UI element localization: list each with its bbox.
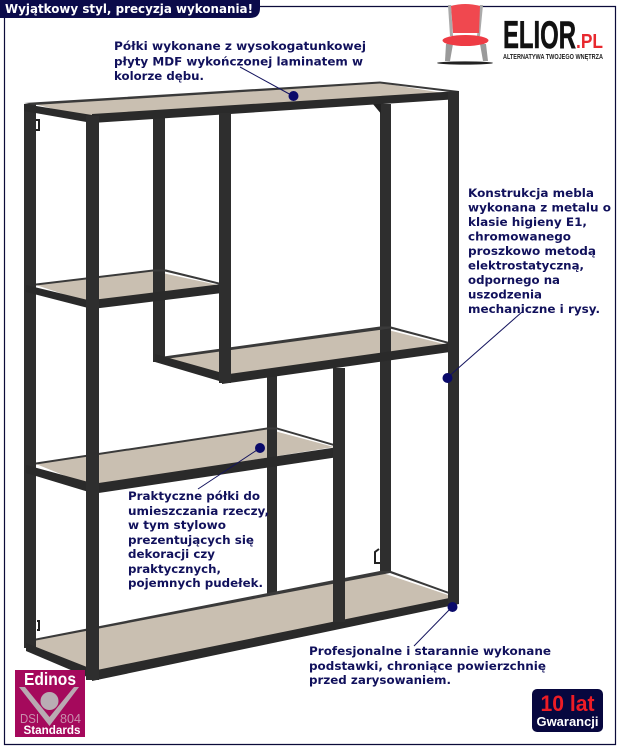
text: metal construction xyxy=(468,186,611,316)
logo: ELIOR.PL: .PL xyxy=(576,31,603,53)
badge: Edinos DSI 804 Standards: 804 xyxy=(60,712,81,726)
shelf back and side edges xyxy=(24,82,459,640)
callout pointer: protective feet xyxy=(414,602,458,646)
text: practical shelves: pojemnych pudełek. xyxy=(128,576,263,590)
icon: red chair logo xyxy=(437,4,493,65)
callout pointer: shelf material xyxy=(240,67,298,101)
logo: ELIOR.PL: ELIOR xyxy=(503,14,576,57)
text: metal construction: klasie higieny E1, xyxy=(468,215,587,229)
header banner: Wyjątkowy styl, precyzja wykonania! xyxy=(5,1,253,16)
badge: 10 lat guarantee: Gwarancji xyxy=(536,715,598,729)
text: metal construction: Konstrukcja mebla xyxy=(468,186,594,200)
text: metal construction: wykonana z metalu o xyxy=(468,200,611,214)
text: metal construction: elektrostatyczną, xyxy=(468,258,584,272)
text: shelf material: kolorze dębu. xyxy=(114,69,204,83)
callout pointer: practical shelves xyxy=(198,443,265,489)
badge: Edinos DSI 804 Standards xyxy=(15,669,85,737)
text: practical shelves xyxy=(128,489,269,590)
callout pointer: metal construction xyxy=(442,312,522,383)
text: shelf material: płyty MDF wykończonej laminatem w xyxy=(114,54,363,68)
shelving unit xyxy=(24,82,459,681)
text: practical shelves: prezentujących się xyxy=(128,533,254,547)
text: practical shelves: w tym stylowo xyxy=(128,518,226,532)
badge: Edinos DSI 804 Standards: DSI xyxy=(20,712,39,726)
text: metal construction: odpornego na xyxy=(468,273,560,287)
text: metal construction: proszkowo metodą xyxy=(468,244,596,258)
wall hooks xyxy=(36,105,380,630)
shelf boards xyxy=(34,83,450,673)
back posts xyxy=(24,104,391,648)
text: shelf material xyxy=(114,39,366,83)
text: metal construction: mechaniczne i rysy. xyxy=(468,302,600,316)
text: protective feet: przed zarysowaniem. xyxy=(309,673,451,687)
front posts xyxy=(86,92,459,680)
badge: 10 lat guarantee: 10 lat xyxy=(540,691,595,716)
text: metal construction: uszodzenia xyxy=(468,288,542,302)
shelf front rails xyxy=(24,91,459,681)
text: practical shelves: Praktyczne półki do xyxy=(128,489,260,503)
badge: Edinos DSI 804 Standards: Edinos xyxy=(24,669,76,689)
text: protective feet: Profesjonalne i starannie wykonane xyxy=(309,644,551,658)
text: shelf material: Półki wykonane z wysokogatunkowej xyxy=(114,39,366,53)
text: protective feet: podstawki, chroniące powierzchnię xyxy=(309,659,546,673)
text: practical shelves: dekoracji czy xyxy=(128,547,216,561)
badge: Edinos DSI 804 Standards: Standards xyxy=(24,725,80,737)
text: protective feet xyxy=(309,644,551,687)
text: metal construction: chromowanego xyxy=(468,230,571,244)
text: practical shelves: umieszczania rzeczy, xyxy=(128,504,269,518)
text: practical shelves: praktycznych, xyxy=(128,562,221,576)
badge: 10 lat guarantee xyxy=(532,689,603,732)
